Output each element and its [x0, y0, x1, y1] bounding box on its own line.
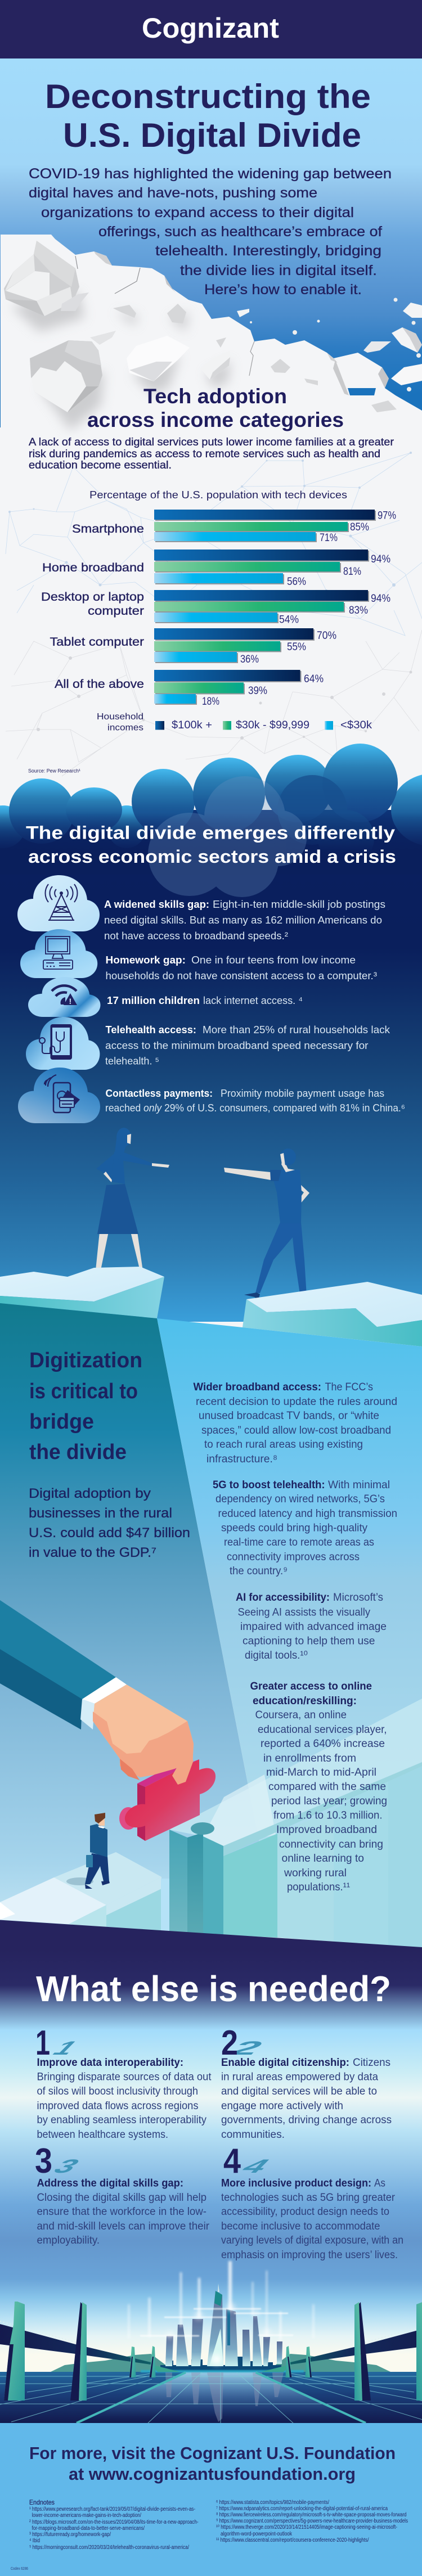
- fact: contactless: reached only 29% of U.S. consumers, compared with 81% in China.⁶: [105, 1102, 405, 1114]
- legend: <$30k: [340, 719, 372, 731]
- water panel left: [0, 1303, 277, 1935]
- item 4: more inclusive product design: technologies such as 5G bring greater: [221, 2192, 396, 2204]
- lower left puzzle platform: [0, 1852, 169, 1935]
- digital adoption statement: in value to the GDP.⁷: [29, 1545, 156, 1560]
- fact: skills gap: A widened skills gap:: [104, 899, 209, 910]
- endnotes left column: ⁴ Ibid: [29, 2538, 40, 2544]
- middle white rock: [127, 336, 230, 381]
- item 4: more inclusive product design: As: [374, 2178, 385, 2189]
- icon: computer cloud: [20, 929, 97, 978]
- endnotes right column: ¹¹ https://www.classcentral.com/report/coursera-conference-2020-highlights/: [216, 2537, 369, 2543]
- ice field with rocks: [0, 235, 422, 844]
- icon: wifi warning cloud: [28, 977, 100, 1017]
- notch column faces: [169, 1830, 187, 1935]
- group: all of the above: 39%: [248, 685, 267, 697]
- ice platform right: [243, 1282, 422, 1346]
- endnotes right column: [216, 2500, 408, 2543]
- cuff: [82, 1677, 127, 1704]
- section heading: digital divide: across economic sectors amid a crisis: [28, 846, 396, 867]
- tech adoption paragraph: [29, 436, 394, 471]
- figure: man: [224, 1149, 309, 1302]
- network mesh gray: [6, 630, 422, 776]
- intro paragraph: [29, 166, 392, 298]
- heading: digitization: [29, 1349, 142, 1464]
- text: greater access to online education: connectivity can bring: [279, 1839, 383, 1850]
- puzzle platform: [169, 1699, 422, 1949]
- endnotes left column: lower-income-americans-make-gains-in-tech-adoption/: [32, 2512, 141, 2519]
- header band: [0, 0, 422, 58]
- fact: telehealth: access to the minimum broadband speed necessary for: [105, 1040, 369, 1051]
- item 3: address the digital skills gap: employability.: [37, 2235, 100, 2246]
- section heading: tech adoption: across income categories: [87, 408, 344, 431]
- upper left slab rock: [4, 241, 89, 316]
- ice edge shading and cracks: [75, 251, 389, 395]
- text: 5G to boost telehealth: connectivity improves across: [227, 1551, 360, 1563]
- item 4: more inclusive product design: 4: [235, 2155, 277, 2177]
- heading: digitization: is critical to: [29, 1380, 138, 1403]
- text: wider broadband access: infrastructure.⁸: [206, 1453, 277, 1465]
- footer call to action: [29, 2443, 396, 2484]
- digital adoption statement: [29, 1486, 190, 1560]
- item 2: enable digital citizenship: governments, driving change across: [221, 2114, 392, 2126]
- endnotes right column: ⁷ https://www.ndpanalytics.com/report-unlocking-the-digital-potential-of-rural-america: [216, 2506, 388, 2512]
- floating rocks over blue: [237, 298, 422, 391]
- item 2: enable digital citizenship: 2: [221, 2024, 238, 2062]
- section heading: digital divide: The digital divide emerges differently: [26, 822, 395, 843]
- group: smartphone: 97%: [378, 510, 396, 522]
- item 2: enable digital citizenship: and digital services will be able to: [221, 2086, 377, 2097]
- group: smartphone: 71%: [320, 532, 338, 544]
- group: home broadband: 81%: [343, 566, 361, 578]
- text: greater access to online education: in enrollments from: [263, 1753, 356, 1764]
- text: AI for accessibility: impaired with advanced image: [240, 1621, 387, 1633]
- group: desktop or laptop: 54%: [279, 614, 299, 625]
- item 2: enable digital citizenship: [221, 2024, 392, 2141]
- item 4: more inclusive product design: emphasis on improving the users’ lives.: [221, 2249, 398, 2261]
- tower reflections: [165, 2372, 284, 2422]
- item 3: address the digital skills gap: and mid-skill levels can improve their: [37, 2221, 210, 2232]
- text: AI for accessibility: [236, 1592, 387, 1661]
- road edges: [77, 2372, 366, 2423]
- text: AI for accessibility: captioning to help them use: [243, 1636, 375, 1647]
- text: AI for accessibility: Microsoft’s: [333, 1592, 383, 1604]
- item 2: enable digital citizenship: communities.: [221, 2129, 285, 2141]
- text: 5G to boost telehealth: [213, 1479, 397, 1577]
- legend: $30k - $99,999: [236, 719, 309, 731]
- text: 5G to boost telehealth: dependency on wired networks, 5G’s: [216, 1493, 385, 1505]
- text: greater access to online education: educational services player,: [258, 1724, 387, 1736]
- section heading: digital divide: [26, 822, 396, 867]
- item 3: address the digital skills gap: 3: [35, 2142, 52, 2181]
- star glows: [167, 2304, 270, 2365]
- text: wider broadband access: to reach rural areas using existing: [204, 1439, 363, 1451]
- fact: children: lack internet access. ⁴: [203, 995, 303, 1006]
- text: 5G to boost telehealth: speeds could bring high-quality: [221, 1522, 367, 1534]
- intro paragraph: Here’s how to enable it.: [204, 282, 362, 298]
- what else section background: [0, 1920, 422, 2377]
- heading: what else is needed: What else is needed?: [36, 1969, 391, 2009]
- text: wider broadband access: [194, 1381, 397, 1465]
- main title: Deconstructing the: [45, 78, 371, 115]
- tech adoption paragraph: A lack of access to digital services puts lower income families at a greater: [29, 436, 394, 448]
- item 4: more inclusive product design: become inclusive to accommodate: [221, 2221, 380, 2232]
- item 4: more inclusive product design: 4: [223, 2142, 241, 2181]
- sleeve: [0, 1600, 116, 1719]
- fact: telehealth: More than 25% of rural households lack: [203, 1024, 390, 1035]
- figure: woman: [94, 1128, 169, 1278]
- text: AI for accessibility: Seeing AI assists the visually: [237, 1606, 370, 1619]
- fact: children: 17 million children: [107, 995, 200, 1006]
- group: all of the above: 64%: [304, 673, 324, 685]
- intro paragraph: digital haves and have-nots, pushing some: [29, 185, 317, 201]
- footer call to action: For more, visit the Cognizant U.S. Foundation: [29, 2443, 396, 2463]
- main title: U.S. Digital Divide: [63, 116, 361, 154]
- item 3: address the digital skills gap: [35, 2142, 210, 2246]
- top surface: [169, 1699, 422, 1846]
- group: all of the above: [55, 670, 324, 708]
- bar shadows: [155, 511, 376, 705]
- text: greater access to online education: period last year; growing: [271, 1795, 387, 1807]
- intro paragraph: telehealth. Interestingly, bridging: [155, 243, 381, 259]
- intro paragraph: the divide lies in digital itself.: [180, 263, 377, 278]
- ground grid: [0, 2372, 422, 2423]
- group: all of the above: All of the above: [55, 678, 144, 691]
- group: smartphone: 85%: [350, 521, 369, 533]
- light wedge: [203, 1775, 276, 1846]
- horizon glow: [141, 2370, 304, 2372]
- tech adoption paragraph: education become essential.: [29, 460, 172, 471]
- text: greater access to online education: Coursera, an online: [255, 1709, 347, 1721]
- icon: wifi warning cloud: !: [69, 997, 71, 1006]
- chart title: Percentage of the U.S. population with tech devices: [89, 489, 347, 501]
- ice platform left: [0, 1267, 164, 1318]
- endnotes left column: ² https://blogs.microsoft.com/on-the-issues/2019/04/08/its-time-for-a-new-approach-: [29, 2519, 199, 2525]
- group: tablet computer: 70%: [317, 630, 336, 642]
- fact: skills gap: not have access to broadband speeds.²: [104, 930, 288, 942]
- group: desktop or laptop: Desktop or laptop: [41, 591, 144, 604]
- text: 5G to boost telehealth: the country.⁹: [230, 1565, 288, 1577]
- dark section background: [0, 810, 422, 1322]
- group: desktop or laptop: computer: [88, 605, 144, 618]
- illustration: hand placing puzzle piece: [0, 1600, 216, 1841]
- item 1: improve data interoperability: between healthcare systems.: [37, 2129, 168, 2141]
- fact: contactless: Proximity mobile payment usage has: [221, 1088, 384, 1099]
- legend: $100k +: [172, 719, 212, 731]
- footer call to action: at www.cognizantusfoundation.org: [69, 2464, 356, 2484]
- endnotes left column: Endnotes: [29, 2498, 55, 2506]
- item 1: improve data interoperability: improved data flows across regions: [37, 2100, 198, 2112]
- group: smartphone: Smartphone: [72, 523, 144, 535]
- text: greater access to online education: reported a 640% increase: [261, 1738, 385, 1750]
- fade into navy: [0, 813, 422, 875]
- item 3: address the digital skills gap: Address the digital skills gap:: [37, 2178, 183, 2189]
- text: wider broadband access: unused broadcast TV bands, or “white: [199, 1410, 379, 1422]
- right faces: [223, 1834, 277, 1938]
- small rock details on ice: [113, 304, 397, 412]
- item 4: more inclusive product design: More inclusive product design:: [221, 2178, 371, 2189]
- endnotes left column: ⁵ https://morningconsult.com/2020/03/24/telehealth-coronavirus-rural-america/: [29, 2545, 189, 2551]
- text: AI for accessibility: AI for accessibility:: [236, 1592, 330, 1604]
- item 1: improve data interoperability: Bringing disparate sources of data out: [37, 2071, 212, 2083]
- text: wider broadband access: spaces,” could allow low-cost broadband: [201, 1425, 391, 1436]
- item 4: more inclusive product design: [221, 2142, 403, 2261]
- illustration: futuristic city and bridge: [0, 2261, 422, 2423]
- group: tablet computer: Tablet computer: [50, 636, 144, 648]
- text: greater access to online education: online learning to: [281, 1853, 364, 1865]
- water panel right: [157, 1318, 422, 1952]
- item 1: improve data interoperability: Improve data interoperability:: [37, 2057, 183, 2069]
- puzzle piece: [137, 1784, 145, 1841]
- mountains: [51, 2354, 390, 2372]
- item 3: address the digital skills gap: ensure that the workforce in the low-: [37, 2206, 206, 2218]
- legend: Household: [97, 712, 143, 722]
- group: smartphone: [72, 510, 396, 544]
- group: tablet computer: 55%: [287, 641, 306, 653]
- text: 5G to boost telehealth: With minimal: [328, 1479, 390, 1491]
- item 2: enable digital citizenship: Citizens: [353, 2057, 390, 2069]
- source note: Source: Pew Research¹: [28, 768, 80, 774]
- heading: digitization: Digitization: [29, 1349, 142, 1372]
- text: wider broadband access: The FCC’s: [325, 1381, 373, 1393]
- lighter inner cloud: [148, 776, 307, 897]
- item 3: address the digital skills gap: Closing the digital skills gap will help: [37, 2192, 206, 2204]
- item 3: address the digital skills gap: 3: [47, 2155, 87, 2177]
- big gray rock: [30, 331, 116, 412]
- tech adoption paragraph: risk during pandemics as access to remote services such as health and: [29, 448, 380, 460]
- text: AI for accessibility: digital tools.¹⁰: [245, 1650, 308, 1661]
- group: desktop or laptop: [41, 590, 390, 625]
- list: economic sector facts: [104, 899, 405, 1114]
- right bridge: [261, 2302, 422, 2401]
- digital adoption statement: U.S. could add $47 billion: [29, 1525, 190, 1541]
- text: wider broadband access: Wider broadband access:: [194, 1381, 321, 1393]
- endnotes left column: [29, 2498, 199, 2551]
- fact: homework gap: households do not have consistent access to a computer.³: [106, 970, 377, 981]
- fact: contactless: [105, 1088, 405, 1114]
- digital adoption statement: businesses in the rural: [29, 1506, 172, 1521]
- fact: homework gap: One in four teens from low income: [191, 954, 356, 966]
- fact: skills gap: [104, 899, 385, 942]
- network mesh blue: [6, 453, 422, 636]
- text: 5G to boost telehealth: reduced latency and high transmission: [218, 1508, 397, 1520]
- digital adoption statement: Digital adoption by: [29, 1486, 151, 1501]
- heading: digitization: bridge: [29, 1410, 94, 1434]
- small businessman figure: [66, 1813, 110, 1889]
- legend: [97, 712, 372, 733]
- item 1: improve data interoperability: 1: [47, 2037, 85, 2059]
- group: all of the above: 18%: [202, 696, 219, 708]
- heading: digitization: the divide: [29, 1440, 127, 1464]
- blue notch in ice: [348, 388, 376, 395]
- item 4: more inclusive product design: varying levels of digital exposure, with an: [221, 2235, 403, 2246]
- fact: skills gap: need digital skills. But as many as 162 million Americans do: [104, 915, 382, 926]
- endnotes left column: ¹ https://www.pewresearch.org/fact-tank/2019/05/07/digital-divide-persists-even-as-: [29, 2506, 195, 2512]
- item 4: more inclusive product design: accessibility, product design needs to: [221, 2206, 389, 2218]
- group: home broadband: 94%: [371, 553, 390, 565]
- fact: homework gap: [106, 954, 377, 981]
- item 1: improve data interoperability: 1: [35, 2024, 50, 2062]
- group: home broadband: 56%: [287, 576, 306, 588]
- fact: telehealth: telehealth. ⁵: [105, 1055, 159, 1066]
- fact: telehealth: Telehealth access:: [106, 1024, 196, 1035]
- text: greater access to online education: mid-March to mid-April: [266, 1767, 376, 1778]
- text: 5G to boost telehealth: real-time care to remote areas as: [224, 1537, 374, 1548]
- text: greater access to online education: Greater access to online: [250, 1681, 372, 1692]
- hand: [93, 1685, 194, 1785]
- fact: children: [107, 995, 303, 1006]
- text: greater access to online education: education/reskilling:: [253, 1695, 357, 1707]
- left bridge: [0, 2302, 180, 2401]
- item 2: enable digital citizenship: in rural areas empowered by data: [221, 2071, 378, 2083]
- text: greater access to online education: [250, 1681, 387, 1893]
- endnotes right column: ⁶ https://www.statista.com/topics/982/mobile-payments/: [216, 2500, 329, 2506]
- endnotes right column: algorithm-word-powerpoint-outlook: [221, 2531, 293, 2537]
- item 2: enable digital citizenship: engage more actively with: [221, 2100, 343, 2112]
- item 2: enable digital citizenship: 2: [224, 2037, 271, 2059]
- text: greater access to online education: populations.¹¹: [287, 1881, 350, 1893]
- legend: incomes: [107, 723, 143, 733]
- icon: antenna cloud: [17, 875, 100, 931]
- text: greater access to online education: Improved broadband: [276, 1824, 377, 1836]
- text: greater access to online education: from 1.6 to 10.3 million.: [273, 1810, 383, 1821]
- section heading: tech adoption: [87, 385, 344, 431]
- fact: contactless: Contactless payments:: [106, 1088, 213, 1099]
- skyline blocks: [160, 2357, 281, 2372]
- sky gradient: [0, 58, 422, 452]
- text: 5G to boost telehealth: 5G to boost telehealth:: [213, 1479, 325, 1491]
- ground: [0, 2372, 422, 2423]
- group: home broadband: Home broadband: [42, 561, 144, 574]
- group: tablet computer: 36%: [240, 654, 259, 665]
- item 2: enable digital citizenship: Enable digital citizenship:: [221, 2057, 349, 2069]
- icon: contactless payment cloud: [18, 1068, 100, 1123]
- text: greater access to online education: compared with the same: [268, 1781, 386, 1793]
- item 1: improve data interoperability: by enabling seamless interoperability: [37, 2114, 206, 2126]
- cloud band: [0, 744, 422, 897]
- darker back lobes: [277, 775, 374, 866]
- rock shadows: [11, 292, 231, 430]
- network mesh nodes: [8, 452, 412, 609]
- group: home broadband: [42, 550, 390, 588]
- intro paragraph: offerings, such as healthcare’s embrace of: [98, 224, 382, 240]
- network nodes gray: [37, 643, 412, 740]
- item 1: improve data interoperability: of silos will boost inclusivity through: [37, 2086, 198, 2097]
- horizontal flares: [140, 2308, 293, 2336]
- group: tablet computer: [50, 628, 336, 665]
- section heading: tech adoption: Tech adoption: [143, 385, 287, 408]
- Cognizant logo: Cognizant: [142, 12, 279, 44]
- endnotes left column: for-mapping-broadband-data-to-better-serve-americans/: [32, 2525, 145, 2532]
- intro paragraph: organizations to expand access to their digital: [41, 205, 354, 220]
- endnotes left column: ³ https://futureready.org/homework-gap/: [29, 2532, 111, 2538]
- group: desktop or laptop: 94%: [371, 593, 390, 605]
- fact: telehealth: [105, 1024, 390, 1066]
- light streaks: [128, 2261, 314, 2340]
- codex number: Codex 6286: [11, 2567, 28, 2571]
- icon: phone stethoscope cloud: [26, 1017, 100, 1070]
- fact: homework gap: Homework gap:: [106, 954, 186, 966]
- text: wider broadband access: recent decision to update the rules around: [196, 1396, 397, 1408]
- item 1: improve data interoperability: [35, 2024, 212, 2141]
- fact: skills gap: Eight-in-ten middle-skill job postings: [213, 899, 385, 910]
- footer panel: [0, 2423, 422, 2576]
- bar chart: [41, 510, 396, 708]
- text: greater access to online education: working rural: [284, 1867, 347, 1879]
- towers: [165, 2291, 282, 2366]
- intro paragraph: COVID-19 has highlighted the widening gap between: [29, 166, 392, 182]
- main title: [45, 78, 371, 154]
- group: desktop or laptop: 83%: [349, 605, 368, 616]
